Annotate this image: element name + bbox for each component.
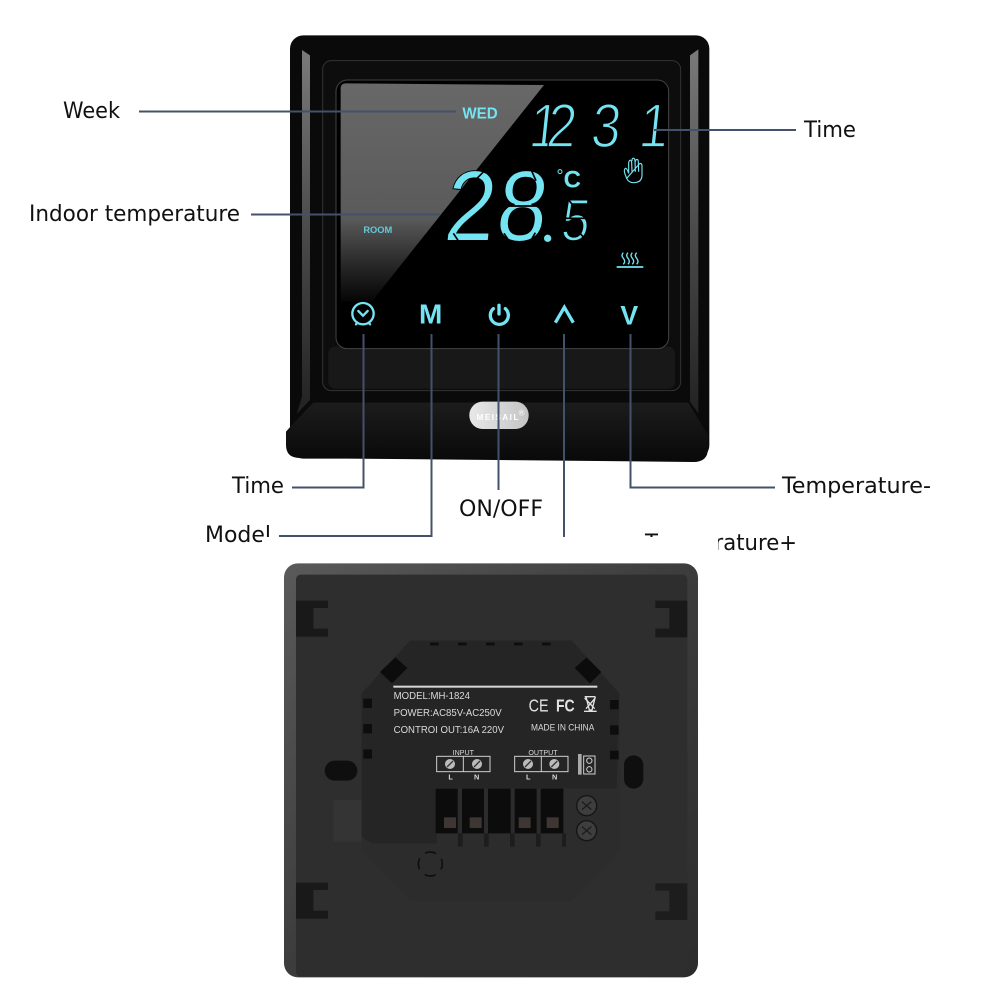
screen (336, 80, 669, 349)
model text: MODEL:MH-1824 (394, 691, 470, 702)
mounting hole: right (624, 755, 643, 789)
segment gaps (453, 169, 587, 243)
output terminals (515, 748, 568, 782)
icon: up button (555, 307, 573, 323)
brand badge: ® (519, 408, 525, 417)
leader line: time button (292, 334, 364, 488)
slot: top left (296, 601, 328, 637)
panel: thermostat front (286, 35, 709, 462)
terminal blocks (436, 789, 566, 847)
mounting hole: left (325, 761, 357, 781)
made in china: MADE IN CHINA (531, 723, 594, 733)
indoor temperature readout: 5 (559, 187, 594, 254)
certification marks (529, 695, 597, 715)
control output text: CONTROI OUT:16A 220V (394, 725, 504, 736)
screws (577, 796, 597, 841)
left bezel highlight (297, 50, 310, 414)
center module (362, 641, 619, 901)
indoor temperature readout: 28 (440, 152, 554, 263)
label: on/off: ON/OFF (459, 497, 543, 522)
mode button: M (419, 298, 442, 329)
icon: heating (617, 253, 643, 267)
icon: clock button (352, 303, 374, 324)
label: time display: Time (803, 118, 856, 143)
label: temperature down: Temperature- (781, 474, 931, 499)
leader line: time display (654, 129, 796, 131)
output terminals: N (552, 773, 557, 782)
sensor opening (418, 852, 442, 876)
glass reflection (341, 83, 544, 302)
inner frame (323, 61, 681, 391)
week indicator: WED (462, 105, 498, 122)
panel: thermostat back (284, 563, 698, 977)
down button: V (620, 301, 638, 331)
leader line: indoor temperature (251, 214, 440, 216)
label: model: Model (205, 523, 271, 548)
input terminals (437, 748, 490, 782)
brand badge (469, 402, 529, 429)
time readout: 1231 (526, 92, 673, 161)
output terminals: L (526, 773, 531, 782)
front casing (290, 35, 709, 459)
lower recess (328, 347, 675, 389)
slot: top right (655, 601, 687, 637)
output terminals: OUTPUT (528, 748, 558, 757)
icon: manual hand (624, 158, 642, 183)
label: temperature up: Temperature+ (644, 531, 797, 556)
slot: bottom left (296, 883, 328, 919)
white mask over labels (262, 537, 718, 567)
certification marks: FC (556, 695, 575, 715)
sensor terminal (578, 754, 595, 775)
room label: ROOM (363, 225, 393, 235)
casing base (286, 403, 708, 462)
slot: bottom right (655, 883, 687, 920)
label: week: Week (63, 99, 120, 124)
right bezel highlight (690, 49, 698, 413)
faint sticker patch (333, 800, 370, 842)
inner back plate (296, 575, 687, 977)
power text: POWER:AC85V-AC250V (394, 708, 502, 719)
leader line: temperature down (630, 334, 775, 488)
certification marks: CE (529, 695, 549, 715)
diamond slot: left (380, 657, 407, 683)
label rule (393, 686, 597, 688)
diamond slot: right (575, 657, 601, 683)
label: time button: Time (231, 474, 284, 499)
label: indoor temperature: Indoor temperature (29, 202, 240, 227)
input terminals: INPUT (453, 748, 474, 757)
label area (362, 641, 619, 843)
icon: power button (490, 305, 508, 324)
input terminals: L (448, 773, 453, 782)
side tabs (363, 699, 619, 759)
leader line: model button (279, 334, 432, 536)
brand badge: MEISAIL (477, 413, 518, 422)
degree celsius: C (564, 166, 581, 193)
input terminals: N (474, 773, 479, 782)
leader line: on/off button (498, 334, 500, 490)
leader line: temperature up (563, 334, 565, 537)
leader line: week (139, 110, 456, 112)
top tabs (430, 643, 551, 645)
back casing (284, 563, 698, 977)
